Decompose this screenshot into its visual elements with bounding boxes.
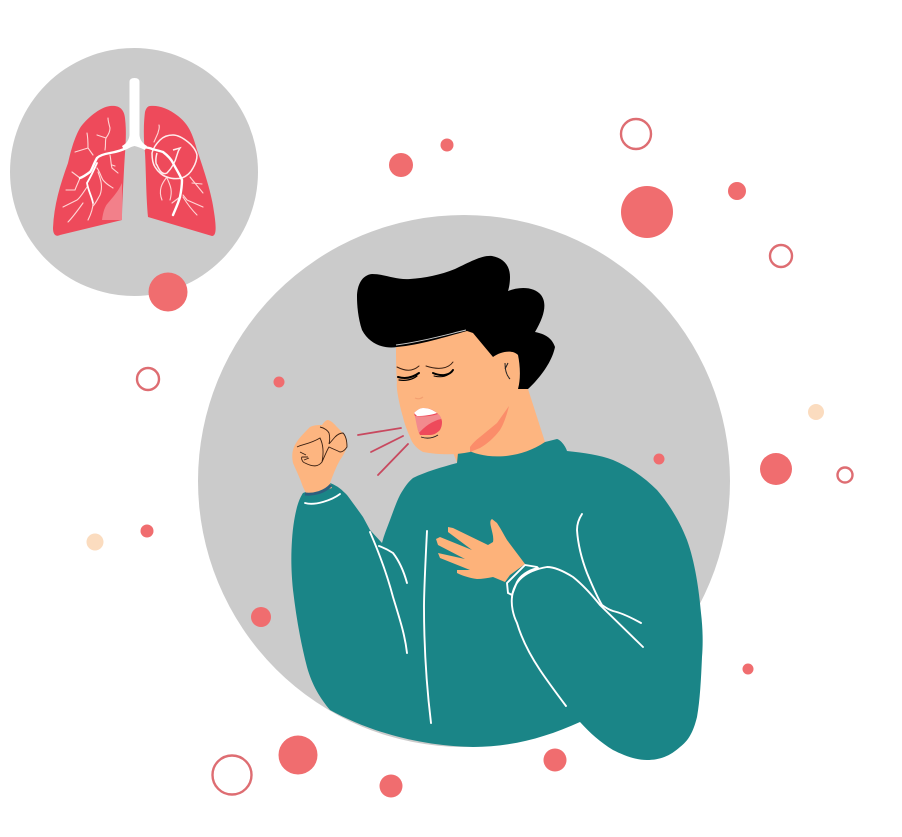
droplets: outlined rings bbox=[137, 119, 852, 794]
sweater fold lines bbox=[370, 514, 643, 723]
hand on chest bbox=[436, 519, 525, 582]
droplets: filled red bbox=[140, 138, 792, 798]
hair bbox=[357, 256, 555, 389]
sweater body bbox=[291, 439, 703, 760]
icon: left lung bbox=[53, 106, 132, 236]
eyebrows and closed eyes bbox=[397, 362, 453, 380]
ear lines bbox=[505, 363, 510, 379]
cough breath lines bbox=[358, 428, 408, 475]
icon: trachea bbox=[122, 78, 147, 150]
large grey background circle bbox=[198, 215, 730, 747]
neck shadow bbox=[470, 406, 509, 452]
mouth bbox=[414, 408, 442, 438]
neck bbox=[440, 380, 545, 470]
man bbox=[291, 256, 703, 760]
sleeve cuff bbox=[305, 485, 340, 504]
lung badge bbox=[10, 48, 258, 296]
icon: right lung bbox=[137, 106, 216, 236]
face bbox=[396, 328, 520, 454]
hair highlight bbox=[396, 330, 466, 345]
nose bbox=[415, 397, 423, 399]
raised fist bbox=[292, 420, 347, 495]
droplets: peach bbox=[86, 404, 824, 550]
